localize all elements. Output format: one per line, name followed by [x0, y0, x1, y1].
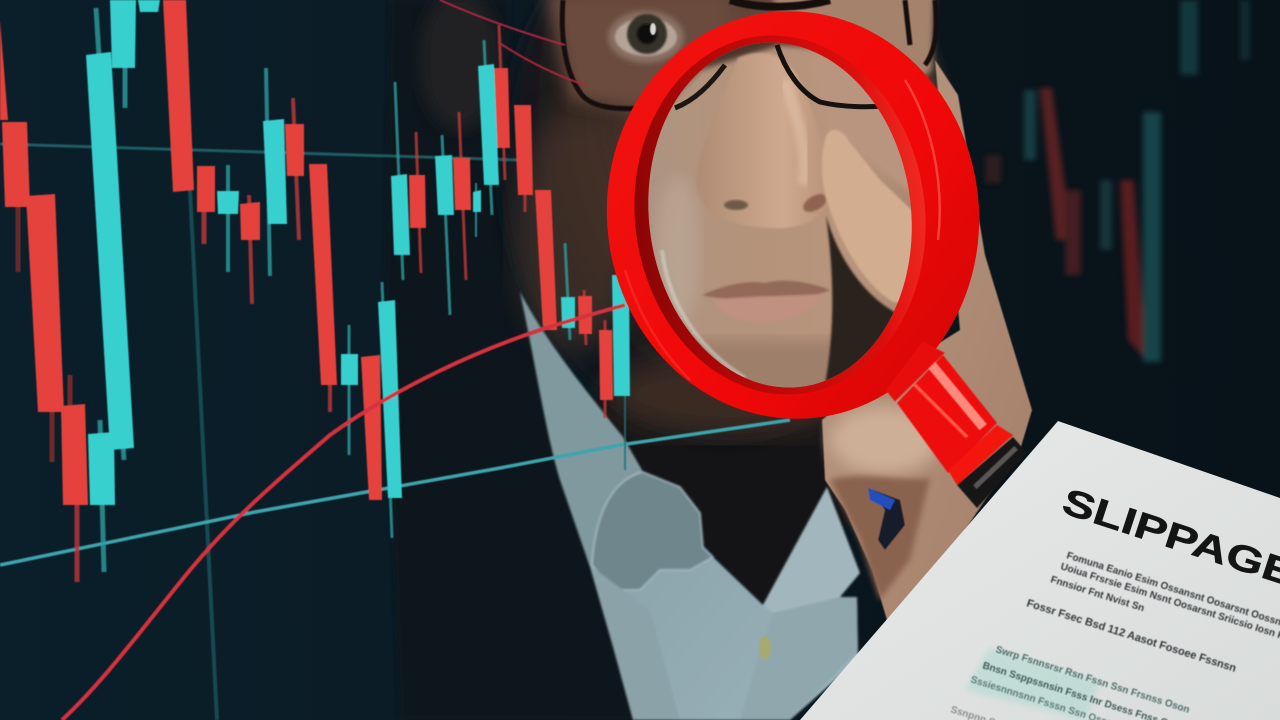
- collar fold: [592, 472, 713, 590]
- lower left fold: [592, 567, 680, 720]
- black cap: [957, 437, 1027, 508]
- pen: [868, 488, 905, 550]
- outer ring: [587, 0, 999, 437]
- lens skin: [648, 42, 912, 388]
- document body text: Fossr Fsec Bsd 112 Aasot Fosoee Fssnsn: [1025, 597, 1238, 675]
- right shirt panel: [740, 597, 858, 720]
- teal bodies: [86, 0, 630, 505]
- head shape: [500, 0, 950, 440]
- document body text: [949, 550, 1280, 720]
- magnifying glass: [587, 0, 1027, 508]
- person: head: [500, 0, 950, 440]
- nose highlight: [785, 80, 805, 185]
- candlestick chart: [0, 0, 790, 720]
- red trend curves: [62, 305, 625, 720]
- nostrils: [724, 200, 748, 210]
- horizontal guide lines: [0, 144, 520, 720]
- paper sheet: [800, 421, 1280, 720]
- document body text: Swrp Fsnnsrsr Rsn Fssn Ssn Frsnss Oson: [994, 644, 1191, 716]
- palm highlight: [830, 406, 940, 474]
- button: [759, 636, 771, 660]
- shirt: [520, 292, 860, 720]
- wicks: [18, 8, 625, 582]
- person: suit: [385, 0, 640, 720]
- cap highlight: [975, 448, 1016, 487]
- chin and jaw glow: [605, 353, 855, 437]
- lens glare: [662, 250, 745, 378]
- document body text: Fnnsior Fnt Nvist Sn: [1049, 574, 1146, 614]
- inner bevel: [614, 19, 946, 411]
- lips: [702, 281, 830, 322]
- handle shine: [930, 363, 983, 427]
- highlighted passage: [965, 648, 1100, 720]
- lower shadow: [693, 336, 876, 388]
- upper cheek tones: [826, 58, 910, 194]
- lens: [648, 42, 912, 388]
- shirt body: [520, 292, 858, 720]
- nose: [697, 52, 816, 228]
- left placket band: [520, 292, 643, 567]
- right collar: [763, 487, 860, 613]
- upper cheek: [545, 0, 735, 110]
- blurred background candles: [985, 0, 1250, 362]
- hand: [822, 60, 1032, 630]
- collar: [887, 343, 943, 400]
- rising teal line: [0, 420, 790, 565]
- finger: [822, 130, 920, 305]
- ring highlight: [905, 80, 940, 240]
- document heading: SLIPPAGE: [1058, 481, 1280, 594]
- eye: [608, 11, 684, 63]
- glasses in lens: [777, 45, 890, 107]
- lower cheek glow: [515, 110, 635, 350]
- red bodies: [0, 0, 613, 505]
- deep shadow by finger: [824, 216, 894, 381]
- person: neck shadow: [590, 390, 860, 610]
- forehead: [770, 0, 935, 95]
- handle body: [897, 355, 997, 473]
- glasses frame outside the lens: [562, 0, 936, 109]
- end ring: [948, 425, 1013, 485]
- ear and hair texture: [420, 0, 500, 130]
- handle: [887, 343, 1027, 508]
- document: [800, 421, 1280, 720]
